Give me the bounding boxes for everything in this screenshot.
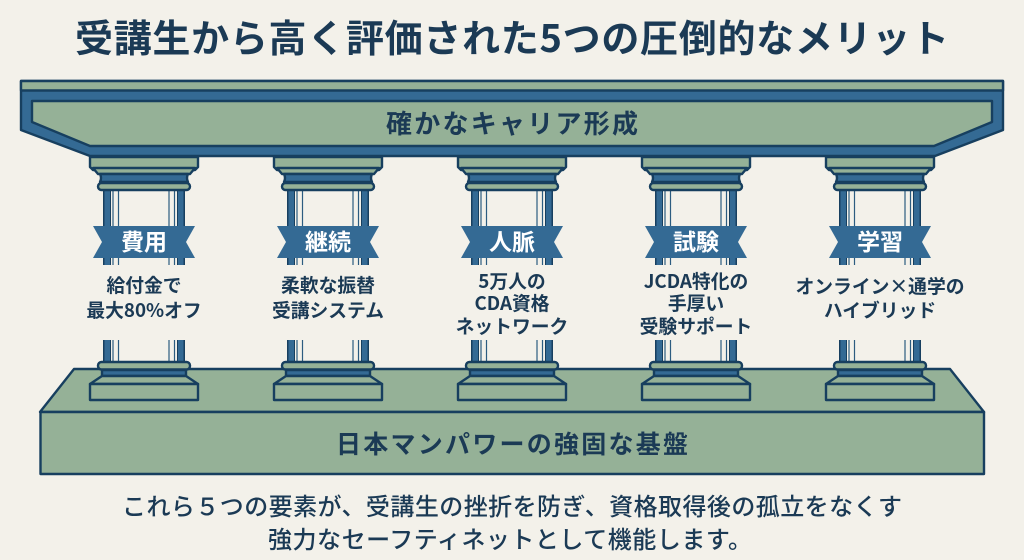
column 5: 学習 — [795, 157, 965, 400]
text: 継続 benefit: 柔軟な振替 — [281, 271, 375, 298]
column 3: 人脈 — [456, 157, 568, 400]
banner: 継続 — [277, 223, 379, 258]
banner: 人脈 — [461, 223, 563, 258]
column 5: 学習: ハイブリッド — [824, 296, 936, 323]
closing statement: これら５つの要素が、受講生の挫折を防ぎ、資格取得後の孤立をなくす — [122, 487, 902, 522]
column 4: 試験 — [640, 157, 752, 400]
column 1: 費用: 最大80%オフ — [86, 296, 202, 323]
banner: 試験 — [645, 223, 747, 258]
text: 学習 benefit: オンライン×通学の — [795, 272, 965, 299]
banner: 試験: 試験 — [673, 223, 719, 257]
column 2: 継続 — [272, 157, 384, 400]
banner: 継続: 継続 — [305, 223, 351, 257]
banner: 学習: 学習 — [857, 223, 903, 257]
foundation label: 日本マンパワーの強固な基盤 — [336, 425, 688, 461]
column 3: 人脈: CDA資格 — [474, 289, 550, 316]
text: 人脈 benefit: 5万人の — [478, 267, 546, 294]
entablature: roof beam — [21, 81, 1003, 156]
closing statement — [122, 487, 902, 555]
banner: 費用: 費用 — [121, 223, 167, 257]
banner: 人脈: 人脈 — [489, 223, 535, 257]
title: 受講生から高く評価された5つの圧倒的なメリット — [75, 8, 949, 63]
stylobate: foundation block — [40, 369, 984, 474]
text: 試験 benefit: JCDA特化の — [644, 267, 748, 294]
banner: 学習 — [829, 223, 931, 258]
column 4: 試験: 受験サポート — [640, 312, 752, 339]
roof label: 確かなキャリア形成 — [386, 104, 638, 141]
column 4: 試験: 手厚い — [668, 289, 724, 316]
column 2: 継続: 受講システム — [272, 296, 384, 323]
column 3: 人脈: ネットワーク — [456, 312, 568, 339]
banner: 費用 — [93, 223, 195, 258]
column 1: 費用 — [86, 157, 202, 400]
closing statement: 強力なセーフティネットとして機能します。 — [268, 520, 752, 555]
text: 費用 benefit: 給付金で — [106, 271, 182, 298]
